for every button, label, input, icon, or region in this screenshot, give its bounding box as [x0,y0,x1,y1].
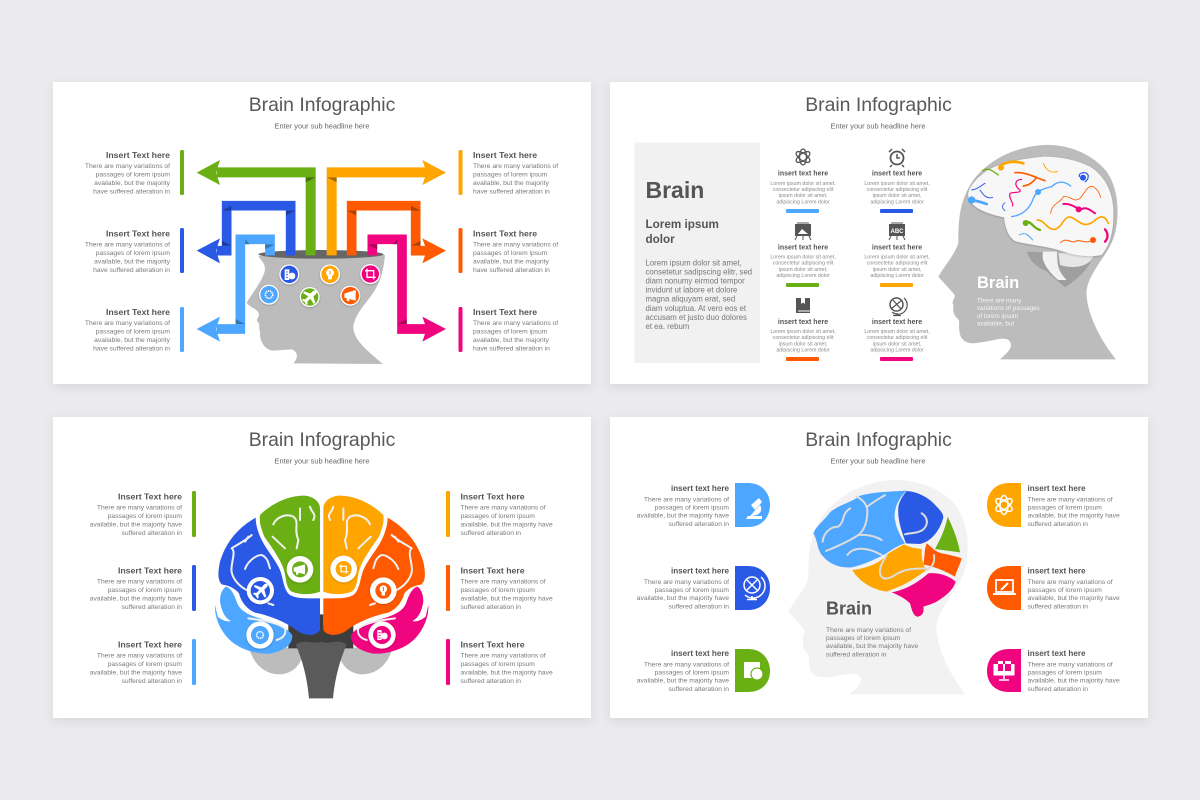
icon: megaphone [287,556,313,583]
item: atom [987,483,1120,528]
head caption: passages of lorem ipsum [826,635,901,642]
right hemisphere [323,496,428,654]
item: globe: available, but the majority have [637,595,729,602]
item: monitor book: insert text here [1028,649,1086,658]
feature: alarm clock: ipsum dolor sit amet, [873,193,921,199]
head silhouette [247,255,385,364]
text block: left 2: There are many variations of [85,242,170,248]
text block: right 2: There are many variations of [460,578,546,586]
cerebellum [1027,252,1093,287]
feature: book: consectetur adipiscing elit [773,335,834,341]
text block: left 2: Insert Text here [118,566,182,576]
title: Brain Infographic [805,94,952,116]
feature: easel picture: insert text here [778,244,828,252]
text block: right 3: Insert Text here [473,307,537,317]
item: laptop: available, but the majority have [1028,595,1120,602]
head caption: available, but [977,320,1014,328]
icon: bulb [320,264,340,284]
item: monitor book: suffered alteration in [1028,686,1088,693]
feature: atom: insert text here [778,170,828,178]
feature: easel abc: ABC [890,229,904,235]
feature: alarm clock: insert text here [872,170,922,178]
sidebar: magna aliquyam erat, sed [646,295,735,304]
text block: right 3 [446,639,553,685]
text block: right 3 [458,307,558,352]
text block: right 3: available, but the majority [473,337,549,344]
text block: right 2: available, but the majority [473,258,549,266]
feature: book: insert text here [778,319,828,326]
feature: easel abc: ipsum dolor sit amet, [873,267,921,273]
item: microscope: suffered alteration in [669,521,729,528]
item: atom: insert text here [1028,484,1086,493]
title: Brain Infographic [805,429,952,451]
item: calendar [637,649,770,693]
head caption: available, but the majority have [826,643,918,650]
text block: right 2: suffered alteration in [460,604,521,611]
text block: right 1: available, but the majority have [460,522,553,528]
text block: right 1 [446,491,553,537]
sidebar: et ea. rebum [646,322,689,331]
text block: right 1: available, but the majority [473,180,549,187]
text block: right 2: available, but the majority have [460,596,553,602]
text block: right 3: There are many variations of [460,652,546,660]
feature: easel abc [864,223,930,287]
brain stem [288,614,353,698]
text block: left 2: have suffered alteration in [93,267,170,274]
panel: arrows infographic [53,82,591,384]
brain lobe: light blue [813,491,907,567]
head opening [258,250,384,259]
text block: right 2: passages of lorem ipsum [473,250,548,257]
brain folds [823,495,934,579]
text block: left 2: passages of lorem ipsum [108,587,182,594]
text block: right 3: There are many variations of [473,320,558,327]
brain lobe: blue [898,491,943,544]
text block: left 3: There are many variations of [97,652,182,660]
text block: left 1: have suffered alteration in [93,188,170,196]
text block: left 1 [85,150,184,196]
arrow: pink [367,239,446,342]
item: atom: There are many variations of [1028,496,1113,504]
item: microscope [637,483,770,528]
icon: coins [279,264,299,284]
text block: left 1: passages of lorem ipsum [108,513,182,520]
text block: right 3: passages of lorem ipsum [460,661,535,668]
text block: left 3 [90,639,196,685]
item: laptop: suffered alteration in [1028,604,1088,610]
text block: right 1: have suffered alteration in [473,188,550,196]
icon: crop [360,264,380,284]
text block: left 3: passages of lorem ipsum [108,661,182,668]
head silhouette [938,145,1118,359]
feature: atom: Lorem ipsum dolor sit amet, [770,181,836,187]
item: microscope: available, but the majority have [637,512,729,520]
head with coloured brain [788,480,968,694]
text block: left 1: There are many variations of [85,163,170,170]
head silhouette [788,480,968,694]
text block: left 1: available, but the majority have [90,522,182,528]
feature: easel picture [770,223,836,287]
feature: atom: ipsum dolor sit amet, [779,193,827,199]
panel: brain overview [610,82,1148,384]
text block: left 3: Insert Text here [118,640,182,650]
feature: atom [770,149,836,213]
text block: right 3: passages of lorem ipsum [473,328,548,336]
head caption: There are many variations of [826,627,911,634]
item: monitor book: There are many variations of [1028,662,1113,668]
text block: right 1 [458,150,558,196]
head with brain [938,145,1118,359]
text block: left 1: available, but the majority [94,180,171,187]
feature: easel abc: Lorem ipsum dolor sit amet, [864,254,930,260]
text block: right 1: Insert Text here [473,150,537,160]
feature: easel picture: consectetur adipiscing elit [773,261,834,267]
text block: right 1: Insert Text here [460,492,525,502]
text block: right 1: There are many variations of [473,163,558,170]
item: globe: passages of lorem ipsum [655,587,729,594]
item: atom: suffered alteration in [1028,521,1088,528]
text block: left 1: There are many variations of [97,504,182,512]
item: monitor book: passages of lorem ipsum [1028,670,1102,676]
item: microscope: There are many variations of [644,496,729,504]
feature: easel abc: insert text here [872,244,922,252]
feature: globe: Lorem ipsum dolor sit amet, [864,329,930,335]
text block: left 1: suffered alteration in [122,530,182,537]
head caption [977,274,1040,328]
feature: alarm clock [864,149,930,213]
sidebar: consetetur sadipscing elitr, sed [646,268,752,276]
icon: plane [300,287,320,307]
head caption: Brain [977,274,1019,292]
icon: coins [368,621,396,649]
title: Brain Infographic [249,94,396,116]
arrow: blue [197,206,295,263]
item: laptop [987,566,1120,610]
feature: alarm clock: Lorem ipsum dolor sit amet, [864,181,930,187]
item: monitor book [987,649,1120,693]
item: atom: passages of lorem ipsum [1028,504,1102,512]
text block: right 2: have suffered alteration in [473,267,550,274]
text block: right 1: There are many variations of [460,504,546,512]
feature: globe: adipiscing Lorem dolor [870,348,924,354]
text block: right 2 [446,565,553,611]
text block: right 2 [458,228,558,274]
text block: right 2: There are many variations of [473,242,558,248]
text block: right 3: available, but the majority have [460,670,553,676]
text block: right 3: Insert Text here [460,640,525,650]
brain lobe: orange [852,544,927,592]
text block: right 2: Insert Text here [473,228,537,238]
text block: left 3: There are many variations of [85,320,170,327]
item: globe: insert text here [671,566,729,576]
brain white [968,157,1113,256]
subtitle: Enter your sub headline here [275,122,369,130]
text block: left 3: have suffered alteration in [93,346,170,352]
icon: gear [259,285,279,305]
item: calendar: passages of lorem ipsum [655,670,729,676]
text block: left 1: Insert Text here [106,150,170,160]
text block: left 1: passages of lorem ipsum [96,172,170,178]
brain lobe: red orange [923,543,962,577]
sidebar: diam voluptua. At vero eos et [646,304,747,313]
text block: left 2: passages of lorem ipsum [96,250,170,257]
title: Brain Infographic [249,429,396,451]
subtitle: Enter your sub headline here [275,456,369,466]
squiggles [969,162,1108,243]
feature: globe: insert text here [872,319,922,326]
text block: left 2: There are many variations of [97,578,182,586]
sidebar: accusam et justo duo dolores [646,313,747,322]
feature: book: adipiscing Lorem dolor [776,348,830,354]
feature: globe: consectetur adipiscing elit [867,335,928,341]
sidebar: Lorem ipsum [646,218,719,231]
text block: left 2: available, but the majority have [90,596,182,602]
item: monitor book: available, but the majority have [1028,678,1120,684]
head caption: variations of passages [977,305,1040,312]
text block: left 2: available, but the majority [94,258,171,266]
item: laptop: There are many variations of [1028,579,1113,586]
panel: side brain [610,417,1148,718]
item: laptop: passages of lorem ipsum [1028,587,1102,594]
arrow: light blue [197,239,275,342]
icon: megaphone [340,286,360,306]
subtitle: Enter your sub headline here [831,456,925,466]
item: calendar: There are many variations of [644,662,729,668]
feature: easel abc: consectetur adipiscing elit [867,261,928,267]
item: calendar: available, but the majority have [637,678,729,684]
sidebar: Lorem ipsum dolor sit amet, [646,258,742,268]
feature: easel picture: adipiscing Lorem dolor [776,273,830,279]
arrow: green [197,160,316,255]
text block: right 1: passages of lorem ipsum [460,513,535,520]
panel: front brain [53,417,591,718]
sidebar: invidunt ut labore et dolore [646,286,737,295]
left hemisphere [215,496,320,654]
sidebar: dolor [646,233,675,246]
head caption: of lorem ipsum [977,313,1018,320]
text block: left 3: available, but the majority [94,337,171,344]
item: laptop: insert text here [1028,566,1086,576]
text block: left 2 [90,565,196,611]
head with arrows [197,160,446,364]
feature: easel abc: adipiscing Lorem dolor [870,273,924,279]
feature: easel picture: Lorem ipsum dolor sit amet, [770,254,836,260]
feature: alarm clock: adipiscing Lorem dolor [870,199,924,205]
brain lobe: pink [892,573,956,617]
feature: globe: ipsum dolor sit amet, [873,341,921,347]
text block: right 2: passages of lorem ipsum [460,587,535,594]
head caption: suffered alteration in [826,652,887,658]
item: globe [637,566,770,610]
text block: left 3: passages of lorem ipsum [96,328,170,336]
feature: book: Lorem ipsum dolor sit amet, [770,329,836,335]
text block: left 1 [90,491,196,537]
cerebellum lobes [250,648,392,674]
text block: left 2: suffered alteration in [122,604,182,611]
icon: plane [247,577,274,604]
text block: left 3: available, but the majority have [90,670,182,676]
text block: left 2: Insert Text here [106,228,170,238]
feature: atom: adipiscing Lorem dolor [776,199,830,205]
sidebar: diam nonumy eirmod tempor [646,277,745,286]
text block: left 1: Insert Text here [118,492,182,502]
head caption: Brain [826,598,872,618]
feature: book: ipsum dolor sit amet, [779,341,827,347]
sidebar [634,142,760,363]
item: globe: suffered alteration in [669,604,729,610]
head caption [826,598,918,658]
item: globe: There are many variations of [644,579,729,586]
sidebar: Brain [646,177,704,203]
icon: crop [330,556,357,582]
text block: right 3: suffered alteration in [460,678,521,685]
feature: book [770,298,836,361]
item: atom: available, but the majority have [1028,512,1120,520]
text block: left 3: Insert Text here [106,307,170,317]
front brain diagram [215,496,428,698]
text block: left 3: suffered alteration in [122,678,182,685]
item: calendar: suffered alteration in [669,686,729,693]
icon: bulb [370,577,397,604]
feature: globe [864,298,930,361]
text block: right 1: passages of lorem ipsum [473,172,548,178]
text block: right 1: suffered alteration in [460,530,521,537]
icon: gear [246,621,274,649]
feature: alarm clock: consectetur adipiscing elit [867,187,928,193]
brain lobe: green [935,517,960,552]
feature: atom: consectetur adipiscing elit [773,187,834,193]
text block: right 3: have suffered alteration in [473,346,550,352]
subtitle: Enter your sub headline here [831,122,925,130]
item: calendar: insert text here [671,649,729,658]
text block: left 2 [85,228,184,274]
text block: right 2: Insert Text here [460,566,525,576]
feature: easel picture: ipsum dolor sit amet, [779,267,827,273]
head caption: There are many [977,298,1022,304]
squiggle nodes [968,165,1096,243]
arrow: orange [327,160,446,255]
text block: left 3 [85,307,184,352]
arrow: red orange [347,206,446,263]
item: microscope: passages of lorem ipsum [655,504,729,512]
item: microscope: insert text here [671,484,729,493]
